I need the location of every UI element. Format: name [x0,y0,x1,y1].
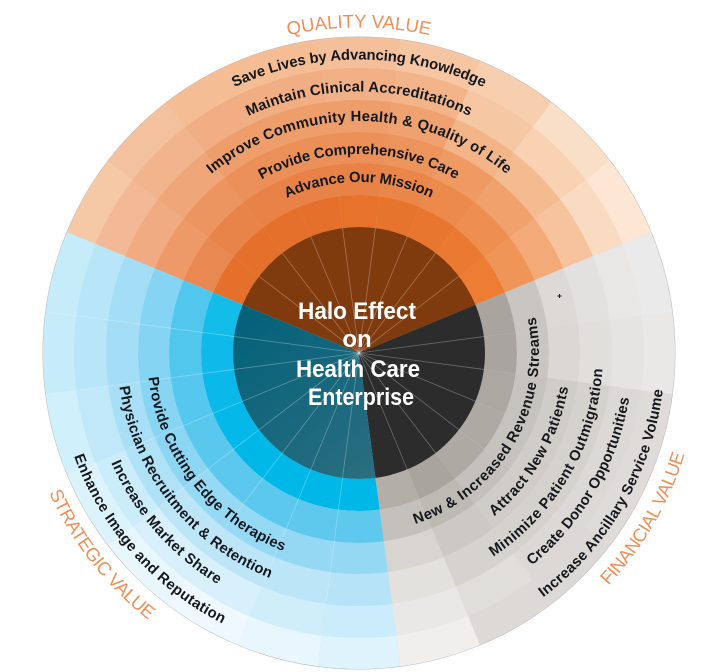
label: Physician Recruitment & Retention: Physician Recruitment & Retention [120,386,272,578]
central hub [233,227,485,479]
label: Save Lives by Advancing Knowledge: Save Lives by Advancing Knowledge [232,48,486,86]
label: Maintain Clinical Accreditations: Maintain Clinical Accreditations [245,80,472,116]
title: Halo Effect on Health Care Enterprise: Halo Effect [298,298,416,325]
panel: financial value [376,232,675,666]
title: Halo Effect on Health Care Enterprise [296,298,420,411]
label: Minimize Patient Outmigration: Minimize Patient Outmigration [488,369,602,556]
panel: quality value [67,37,651,352]
title: Halo Effect on Health Care Enterprise: on [342,326,372,353]
heading: quality value: QUALITY VALUE [287,14,432,37]
financial value ring cells [351,231,675,669]
title: Halo Effect on Health Care Enterprise: Health Care [296,356,420,383]
heading: financial value: FINANCIAL VALUE [600,452,684,584]
label: Provide Comprehensive Care: Provide Comprehensive Care [258,144,458,179]
title: Halo Effect on Health Care Enterprise: Enterprise [308,384,414,411]
quality value ring cells [65,37,653,353]
label: Improve Community Health & Quality of Life: Improve Community Health & Quality of Life [206,110,510,174]
label: Increase Ancillary Service Volume: Increase Ancillary Service Volume [538,390,662,597]
panel: strategic value [43,232,400,669]
label: Advance Our Mission: Advance Our Mission [286,172,433,198]
label: Attract New Patients: Attract New Patients [490,387,568,516]
small cross mark [558,294,562,298]
label: Provide Cutting Edge Therapies: Provide Cutting Edge Therapies [148,377,285,550]
strategic value ring cells [43,231,400,669]
label: Create Donor Opportunities: Create Donor Opportunities [527,398,629,564]
label: New & Increased Revenue Streams: New & Increased Revenue Streams [412,318,540,524]
label: Increase Market Share: Increase Market Share [112,460,220,583]
heading: strategic value: STRATEGIC VALUE [50,490,156,620]
label: Enhance Image and Reputation: Enhance Image and Reputation [74,453,224,624]
